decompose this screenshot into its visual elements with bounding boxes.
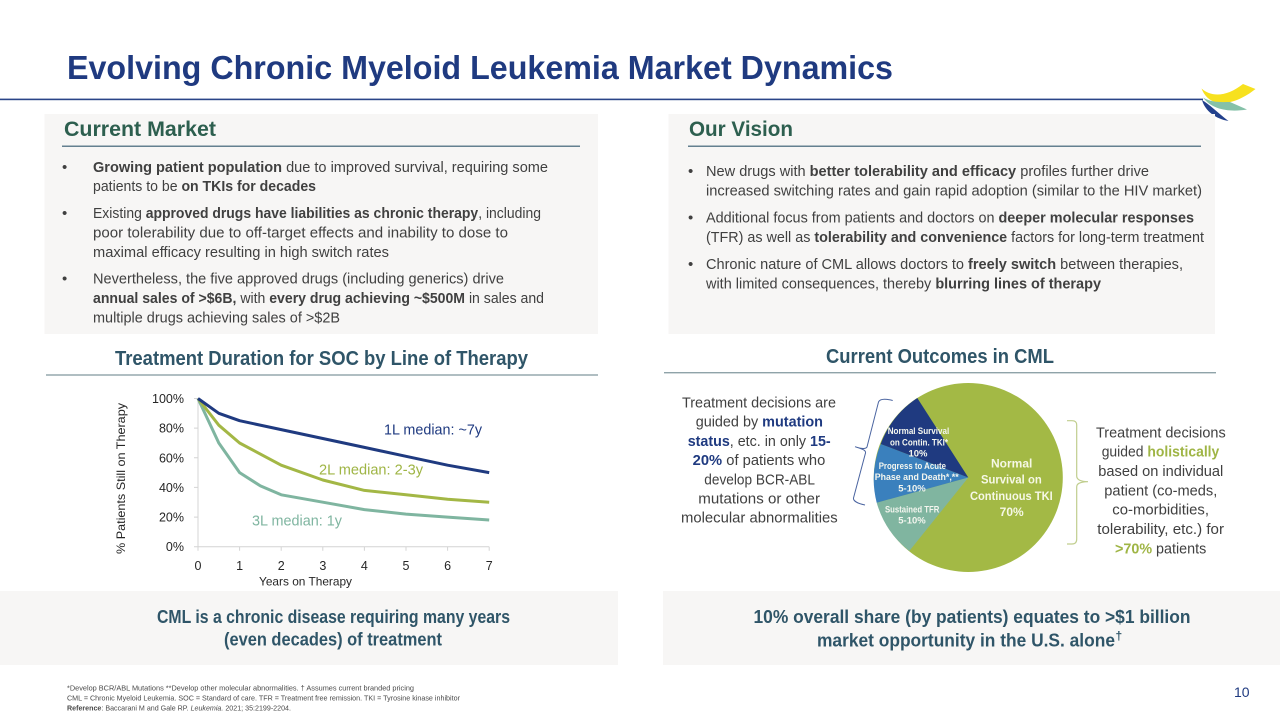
x axis labels: 7 xyxy=(486,559,493,573)
pie chart: outcomes xyxy=(874,383,1063,572)
slice: progress to acute phase xyxy=(874,444,968,503)
text: mutation status note: develop BCR-ABL xyxy=(704,472,815,488)
y axis labels: 0% xyxy=(166,540,184,554)
y axis labels: 20% xyxy=(159,511,184,525)
label: sustained TFR: Sustained TFR xyxy=(885,505,939,516)
text: holistic decisions note: co-morbidities, xyxy=(1112,503,1209,519)
current market bullets: Nevertheless, the five approved drugs (including generics) drive xyxy=(93,270,504,288)
label: normal survival on continuous TKI: Survival on xyxy=(981,473,1042,487)
callout: chronic disease xyxy=(0,591,618,665)
label: normal survival on continuous TKI: Continuous TKI xyxy=(970,489,1053,503)
callout: market opportunity: 10% overall share (by patients) equates to >$1 billion xyxy=(754,607,1190,627)
current market bullets: • xyxy=(62,159,67,176)
current market bullets xyxy=(62,159,548,326)
line chart: treatment duration xyxy=(114,392,493,588)
label: 3L median: 3L median: 1y xyxy=(252,514,343,530)
x axis labels: 2 xyxy=(278,559,285,573)
y axis labels: 100% xyxy=(152,392,184,406)
current market bullets: poor tolerability due to off-target effects and inability to dose to xyxy=(93,224,508,242)
page number: 10 xyxy=(1234,684,1250,700)
heading: treatment duration: Treatment Duration for SOC by Line of Therapy xyxy=(115,348,529,370)
text: holistic decisions note: based on individual xyxy=(1098,464,1223,480)
label: normal survival on continuous TKI: 70% xyxy=(1000,505,1024,519)
current market bullets: annual sales of >$6B, with every drug achieving ~$500M in sales and xyxy=(93,290,544,307)
current market bullets: • xyxy=(62,270,67,288)
current market bullets: maximal efficacy resulting in high switch rates xyxy=(93,244,389,261)
title: Evolving Chronic Myeloid Leukemia Market Dynamics xyxy=(67,49,893,86)
our vision bullets: Chronic nature of CML allows doctors to freely switch between therapies, xyxy=(706,256,1183,273)
our vision bullets: • xyxy=(688,210,693,226)
current market bullets: • xyxy=(62,205,67,222)
text: holistic decisions note xyxy=(1096,426,1226,557)
label: 1L median: 1L median: ~7y xyxy=(384,422,483,438)
label: progress: Progress to Acute xyxy=(879,461,946,472)
line: first line xyxy=(198,398,489,473)
y axis title: % Patients Still on Therapy xyxy=(114,403,128,554)
our vision bullets: New drugs with better tolerability and efficacy profiles further drive xyxy=(706,163,1149,180)
x axis labels: 0 xyxy=(195,559,202,573)
label: normal survival: 10% xyxy=(908,448,928,459)
label: normal survival: Normal Survival xyxy=(888,426,949,437)
callout: chronic disease: CML is a chronic disease requiring many years xyxy=(157,607,510,627)
current market bullets: multiple drugs achieving sales of >$2B xyxy=(93,310,340,326)
our vision bullets: increased switching rates and gain rapid adoption (similar to the HIV market) xyxy=(706,182,1202,200)
label: sustained TFR: 5-10% xyxy=(898,515,926,526)
heading: current market: Current Market xyxy=(64,118,216,141)
callout: market opportunity: † xyxy=(1116,629,1122,643)
text: holistic decisions note: tolerability, etc.) for xyxy=(1097,522,1224,538)
our vision bullets: Additional focus from patients and doctors on deeper molecular responses xyxy=(706,210,1194,226)
our vision bullets: • xyxy=(688,163,693,180)
y axis labels xyxy=(152,392,184,554)
label: normal survival on continuous TKI xyxy=(970,457,1053,519)
line: second line xyxy=(198,398,489,502)
x axis labels: 4 xyxy=(361,559,368,573)
x axis title: Years on Therapy xyxy=(259,574,352,588)
footnotes xyxy=(67,684,461,713)
y axis labels: 60% xyxy=(159,451,184,465)
bracket: right xyxy=(1067,421,1088,544)
callout: market opportunity: market opportunity in the U.S. alone xyxy=(817,630,1115,650)
line: third line xyxy=(198,398,489,520)
heading: current outcomes: Current Outcomes in CML xyxy=(826,346,1054,368)
text: mutation status note xyxy=(681,395,838,526)
our vision bullets: with limited consequences, thereby blurring lines of therapy xyxy=(705,276,1102,292)
text: mutation status note: 20% of patients who xyxy=(693,453,825,469)
current market bullets: patients to be on TKIs for decades xyxy=(93,178,316,195)
footnotes: Reference: Baccarani M and Gale RP. Leukemia. 2021; 35:2199-2204. xyxy=(67,704,291,713)
x axis labels xyxy=(195,559,493,573)
x axis labels: 5 xyxy=(403,559,410,573)
label: normal survival: on Contin. TKI* xyxy=(890,437,948,448)
our vision bullets: • xyxy=(688,256,693,273)
slice: normal survival on contin. TKI xyxy=(881,398,968,478)
current market bullets: Existing approved drugs have liabilities as chronic therapy, including xyxy=(93,205,541,222)
callout: market opportunity xyxy=(663,591,1280,665)
heading: our vision: Our Vision xyxy=(689,118,793,141)
text: mutation status note: guided by mutation xyxy=(696,415,823,431)
header rule xyxy=(0,99,1203,100)
icon: company logo xyxy=(1202,84,1256,121)
label: progress xyxy=(875,461,959,495)
callout: chronic disease: (even decades) of treatment xyxy=(224,630,442,650)
label: progress: 5-10% xyxy=(898,484,926,495)
panel: our vision xyxy=(668,114,1215,334)
label: normal survival xyxy=(888,426,949,459)
text: holistic decisions note: guided holistically xyxy=(1102,445,1219,461)
label: progress: Phase and Death*,** xyxy=(875,472,959,483)
x axis labels: 6 xyxy=(444,559,451,573)
text: mutation status note: mutations or other xyxy=(698,491,820,507)
y axis labels: 40% xyxy=(159,481,184,495)
our vision bullets xyxy=(688,163,1205,292)
x axis labels: 3 xyxy=(319,559,326,573)
footnotes: *Develop BCR/ABL Mutations **Develop other molecular abnormalities. † Assumes current branded pricing xyxy=(67,684,414,693)
y axis labels: 80% xyxy=(159,422,184,436)
text: holistic decisions note: >70% patients xyxy=(1115,541,1206,557)
text: mutation status note: Treatment decisions are xyxy=(682,395,836,411)
panel: current market xyxy=(44,114,598,334)
our vision bullets: (TFR) as well as tolerability and convenience factors for long-term treatment xyxy=(706,229,1205,246)
bracket: left xyxy=(853,399,893,505)
footnotes: CML = Chronic Myeloid Leukemia. SOC = Standard of care. TFR = Treatment free remission. TKI = Tyrosine kinase inhibitor xyxy=(67,694,461,703)
current market bullets: Growing patient population due to improved survival, requiring some xyxy=(93,159,548,176)
text: holistic decisions note: Treatment decisions xyxy=(1096,426,1226,442)
text: mutation status note: molecular abnormalities xyxy=(681,510,838,526)
slice: sustained TFR xyxy=(877,478,968,551)
x axis labels: 1 xyxy=(236,559,243,573)
text: holistic decisions note: patient (co-meds, xyxy=(1104,483,1217,499)
text: mutation status note: status, etc. in only 15- xyxy=(688,434,831,450)
label: normal survival on continuous TKI: Normal xyxy=(991,457,1032,471)
label: sustained TFR xyxy=(885,505,939,526)
label: 2L median: 2L median: 2-3y xyxy=(319,462,424,478)
